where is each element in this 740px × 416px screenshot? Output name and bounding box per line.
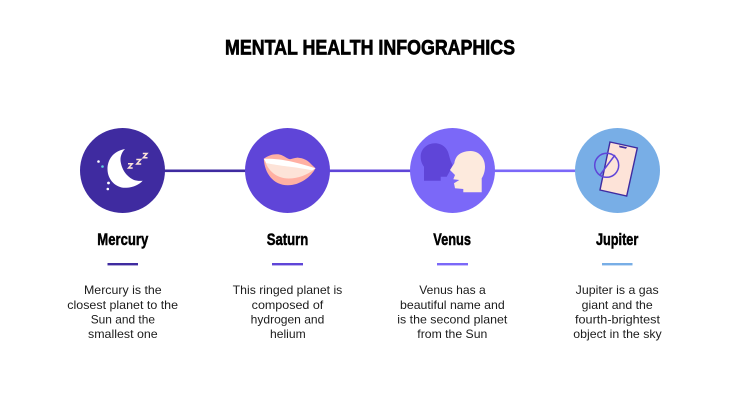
icon: mouth [245,128,330,213]
text: Mercury description: smallest one [88,327,158,341]
text: Mercury description: Sun and the [91,312,155,326]
divider: Saturn [272,263,303,265]
icon: phone with prohibition sign [575,128,660,213]
heading: Jupiter: Jupiter [596,231,639,249]
panel: Mercury [67,128,178,341]
text: Jupiter description: giant and the [582,298,653,312]
panel: Venus [397,128,508,341]
text: Saturn description: hydrogen and [251,312,324,326]
text: Mercury description: Mercury is the [84,283,162,297]
heading: Saturn: Saturn [267,231,308,249]
connector: Mercury to Saturn [160,170,250,172]
title: MENTAL HEALTH INFOGRAPHICS [225,36,515,60]
text: Mercury description [67,283,178,341]
text: Mercury description: closest planet to the [67,298,178,312]
text: Jupiter description [573,283,662,341]
text: Venus description: Venus has a [419,283,486,297]
text: Venus description: beautiful name and [400,298,505,312]
text: Saturn description: helium [270,327,306,341]
icon: two talking heads [410,128,495,213]
divider: Jupiter [602,263,632,265]
connector: Venus to Jupiter [490,170,580,172]
text: Jupiter description: fourth-brightest [575,312,661,326]
heading: Mercury: Mercury [97,231,149,249]
text: Jupiter description: Jupiter is a gas [576,283,659,297]
connector: Saturn to Venus [325,170,415,172]
panel: Saturn [233,128,342,341]
panel: Jupiter [573,128,662,341]
text: Venus description: is the second planet [397,312,508,326]
text: Venus description [397,283,508,341]
divider: Venus [437,263,468,265]
divider: Mercury [108,263,138,265]
heading: Venus: Venus [433,231,471,249]
text: Saturn description: composed of [252,298,324,312]
icon: moon and sleep [80,128,165,213]
text: Saturn description [233,283,342,341]
text: Venus description: from the Sun [417,327,487,341]
text: Saturn description: This ringed planet is [233,283,342,297]
text: Jupiter description: object in the sky [573,327,662,341]
